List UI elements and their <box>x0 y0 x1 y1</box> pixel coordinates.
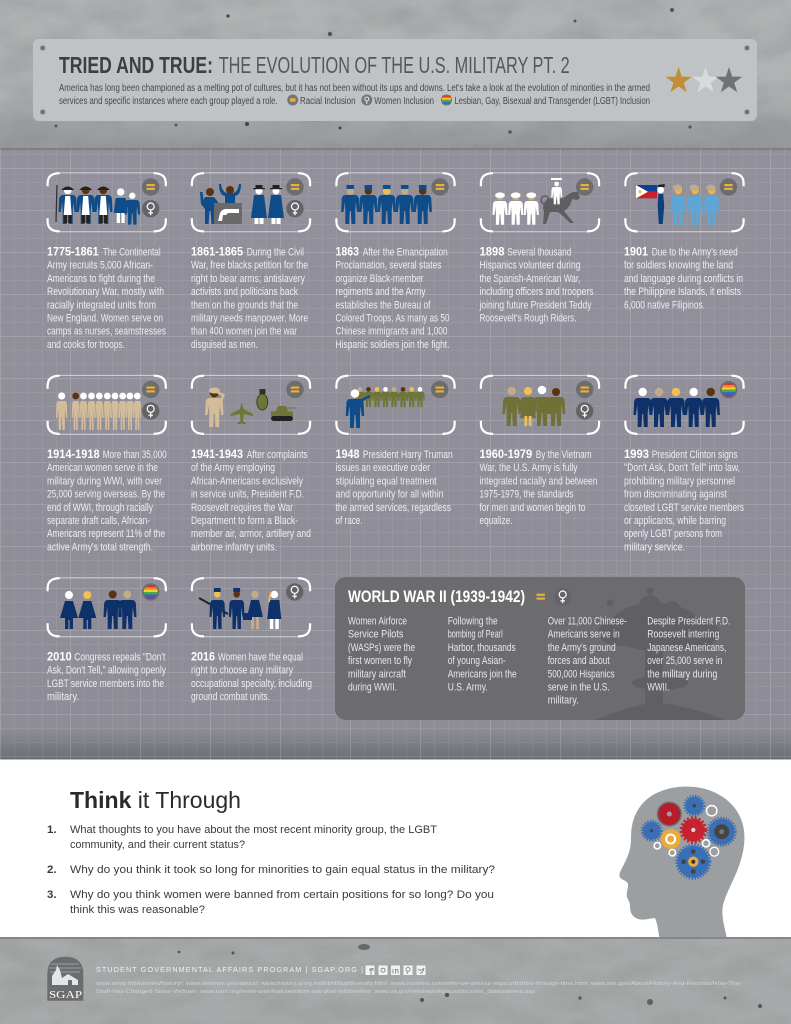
image frame <box>481 173 599 232</box>
text: 1861-1865: activists and politicians back <box>191 286 298 298</box>
text: 1861-1865 <box>191 244 308 351</box>
intro text: services and specific instances where each group played a role. <box>59 96 278 107</box>
text: 1898: Several thousand <box>507 246 571 258</box>
text: 1898 <box>479 244 594 324</box>
text: 1914-1918: 25,000 serving overseas. By the <box>47 489 165 501</box>
text: 1775-1861: Army recruits 5,000 African- <box>47 260 153 272</box>
text: 1993: prohibiting military personnel <box>624 475 735 487</box>
column: Japanese Americans: WWII. <box>647 682 669 694</box>
panel: 1960-1979 <box>480 375 599 527</box>
text: 1863: After the Emancipation <box>363 246 448 258</box>
icon: line of uniformed women <box>56 392 141 430</box>
text: 1914-1918: separate draft calls, African- <box>47 515 150 527</box>
icon: five colored troops <box>341 185 432 224</box>
badge: LGBT <box>142 583 159 601</box>
panel: 1941-1943 <box>191 375 311 553</box>
text: 1861-1865: right to bear arms; antislavery <box>191 273 305 285</box>
text: 1901: 1901 <box>624 244 648 258</box>
image frame <box>625 375 744 434</box>
text: 1914-1918 <box>47 447 167 553</box>
panel: Think it Through <box>0 760 791 938</box>
text: 2016: right to choose any military <box>191 665 293 677</box>
icon: Philippine flag and Filipino soldiers <box>636 184 720 225</box>
question 2: 2. <box>47 864 56 876</box>
text: 1993 <box>624 447 744 553</box>
text: 1775-1861: New England. Women serve on <box>47 312 163 324</box>
text: 1861-1865: disguised as men. <box>191 339 258 351</box>
badge: racial <box>286 178 304 196</box>
icon: two couples <box>60 590 136 629</box>
text: 1898: Hispanics volunteer during <box>480 260 580 272</box>
question 3 <box>47 889 494 916</box>
column: Japanese Americans: the military during <box>647 668 717 680</box>
text: 1993: openly LGBT persons from <box>624 528 722 540</box>
panel: 1861-1865 <box>191 173 310 351</box>
text: 1898: the Spanish-American War, <box>480 273 580 285</box>
text: 1863: establishes the Bureau of <box>336 299 431 311</box>
badge: racial <box>576 178 593 196</box>
text: 1993: 1993 <box>624 447 649 461</box>
image frame <box>336 173 455 232</box>
icon: women in combat and service roles <box>199 588 281 629</box>
text: 1948: of race. <box>336 515 362 527</box>
text: 1863: Chinese immigrants and 1,000 <box>336 326 448 338</box>
text: 1861-1865: than 400 women join the war <box>191 326 297 338</box>
panel: 1914-1918 <box>47 375 167 553</box>
legend: women inclusion: Women Inclusion <box>374 96 434 107</box>
logo: SGAP: SGAP <box>49 989 82 1001</box>
text: 1941-1943: Department to form a Black- <box>191 515 298 527</box>
text: 2016: 2016 <box>191 650 215 664</box>
panel: 2016 <box>191 578 312 703</box>
text: 2010: Ask, Don't Tell," allowing openly <box>47 665 166 677</box>
legend: LGBT inclusion <box>441 94 650 107</box>
heading: WORLD WAR II (1939-1942) <box>348 588 525 606</box>
column: Chinese-Americans and Hispanics: forces and about <box>548 655 610 667</box>
title <box>59 52 570 78</box>
panel: World War II <box>335 577 745 722</box>
text: 1863 <box>336 244 450 351</box>
footer band <box>0 937 791 1024</box>
text: 1941-1943 <box>191 447 311 553</box>
badge: racial <box>720 178 737 196</box>
column: WASPs: Women Airforce <box>348 616 407 628</box>
image frame <box>192 173 310 232</box>
top concrete band <box>0 0 791 149</box>
text: 1861-1865: 1861-1865 <box>191 244 243 258</box>
text: 1941-1943: in service units, President F.D. <box>191 489 304 501</box>
icon: head with gears <box>619 787 744 937</box>
badge: racial <box>286 381 304 398</box>
text: 1861-1865: military needs manpower. More <box>191 312 308 324</box>
panel: 1775-1861 <box>47 173 166 351</box>
text: 1948: President Harry Truman <box>363 449 453 461</box>
text: 1993: military service. <box>624 541 685 553</box>
column: Pearl Harbor: Following the <box>448 616 498 628</box>
grid background panel <box>0 148 791 760</box>
column: Japanese Americans: Despite President F.D. <box>647 616 730 628</box>
text: 1914-1918: American women serve in the <box>47 462 158 474</box>
text: 1898: joining future President Teddy <box>479 299 592 311</box>
text: 1775-1861 <box>47 244 166 351</box>
image frame <box>336 375 455 434</box>
text: 1993: President Clinton signs <box>652 449 738 461</box>
text: 1914-1918: active Army's total strength. <box>47 541 153 553</box>
text: 1960-1979: 1975-1979, the standards <box>480 489 574 501</box>
question 1 <box>47 824 437 851</box>
text: 1993: from discriminating against <box>624 489 727 501</box>
text: 1960-1979: integrated racially and between <box>480 475 598 487</box>
text: 1861-1865: During the Civil <box>247 246 304 258</box>
text: 1960-1979: equalize. <box>480 515 512 527</box>
text: 1948 <box>336 447 453 527</box>
footer program line: STUDENT GOVERNMENTAL AFFAIRS PROGRAM | SGAP.ORG | <box>96 965 363 974</box>
source URLs <box>95 981 742 995</box>
text: 1948: the armed services, regardless <box>336 502 451 514</box>
column: Japanese Americans <box>647 616 730 694</box>
text: 2010: LGBT service members into the <box>47 678 164 690</box>
badge: women <box>286 583 303 601</box>
column: Chinese-Americans and Hispanics: military. <box>548 695 579 707</box>
text: 1898: Roosevelt's Rough Riders. <box>480 312 576 324</box>
text: 1941-1943: After complaints <box>247 449 308 461</box>
text: 2016: ground combat units. <box>191 691 270 703</box>
text: 1863: Hispanic soldiers join the fight. <box>336 339 450 351</box>
text: 1960-1979: By the Vietnam <box>536 449 592 461</box>
icon: continental soldiers and women <box>56 185 140 225</box>
text: 1901: Due to the Army's need <box>652 246 738 258</box>
badge: women <box>554 588 571 605</box>
text: 2010: Congress repeals "Don't <box>74 652 165 664</box>
text: 1960-1979: 1960-1979 <box>480 447 532 461</box>
column: Japanese Americans: Japanese Americans, <box>647 642 726 654</box>
badge: racial <box>576 381 593 398</box>
text: 1775-1861: Revolutionary War, mostly with <box>47 286 164 298</box>
column: Chinese-Americans and Hispanics: serve in the U.S. <box>548 682 610 694</box>
text: 2010: military. <box>47 691 79 703</box>
column: WASPs: Service Pilots <box>348 629 404 641</box>
header plate <box>33 39 757 121</box>
text: 1941-1943: of the Army employing <box>191 462 275 474</box>
text: 1775-1861: The Continental <box>103 246 161 258</box>
text: 1914-1918: 1914-1918 <box>47 447 100 461</box>
text: 2016: Women have the equal <box>218 652 303 664</box>
text: 1901: and language during conflicts in <box>624 273 743 285</box>
column: WASPs: first women to fly <box>348 655 412 667</box>
text: 1948: issues an executive order <box>336 462 430 474</box>
badge: LGBT <box>720 381 737 398</box>
text: 1993: or applicants, while barring <box>624 515 726 527</box>
question 2: Why do you think it took so long for minorities to gain equal status in the military? <box>70 864 495 876</box>
intro text <box>59 83 650 107</box>
title: TRIED AND TRUE: <box>59 52 213 78</box>
text: 1775-1861: racially integrated units from <box>47 299 156 311</box>
panel: 1863 <box>336 173 455 351</box>
icon: three stars <box>665 67 742 92</box>
panel: 2010 <box>47 578 166 703</box>
text: 1863: Colored Troops. As many as 50 <box>336 312 450 324</box>
mushroom cloud <box>590 588 730 722</box>
text: 1948: 1948 <box>336 447 360 461</box>
icon: five service members <box>634 388 720 427</box>
icon: saluting airman, plane, grenade, tank <box>205 388 296 427</box>
column: Chinese-Americans and Hispanics <box>548 616 627 707</box>
text: 1993: "Don't Ask, Don't Tell" into law, <box>624 462 740 474</box>
image frame <box>48 375 166 434</box>
text: 1863: Proclamation, several states <box>336 260 442 272</box>
text: 1941-1943: 1941-1943 <box>191 447 243 461</box>
question 3: think this was reasonable? <box>70 904 205 916</box>
source URLs: www.army.mil/women/history/; www.defense.gov/about/; www.history.army.mil/html/faq/diversity.html; www.marines.com/who-we-are/our-legacy/battles-through-time.html; www.sss.gov/About/History-And-Records/How-The- <box>95 981 742 987</box>
column: Pearl Harbor <box>448 616 517 694</box>
column: Pearl Harbor: Americans join the <box>448 668 517 680</box>
panel: 1898 <box>479 173 599 324</box>
badge: racial <box>142 381 159 398</box>
text: 2010 <box>47 650 166 703</box>
text: 1861-1865: them on the grounds that the <box>191 299 298 311</box>
image frame <box>625 173 744 232</box>
column: Chinese-Americans and Hispanics: the Army's ground <box>548 642 616 654</box>
panel: 1993 <box>624 375 744 553</box>
text: 1914-1918: end of WWI, through racially <box>47 502 153 514</box>
column: WASPs: during WWII. <box>348 682 397 694</box>
text: 1863: organize Black-member <box>336 273 424 285</box>
legend: racial inclusion <box>287 94 356 107</box>
column: Japanese Americans: over 25,000 serve in <box>647 655 722 667</box>
text: 1948: and opportunity for all within <box>336 489 444 501</box>
text: 1948: stipulating equal treatment <box>336 475 436 487</box>
question 3: 3. <box>47 889 56 901</box>
text: 2010: 2010 <box>47 650 72 664</box>
text: 1914-1918: military during WWI, with over <box>47 475 162 487</box>
question 1: What thoughts to you have about the most recent minority group, the LGBT <box>70 824 437 836</box>
logo: SGAP <box>47 957 83 1001</box>
panel: 1948 <box>336 375 455 527</box>
column: Pearl Harbor: bombing of Pearl <box>448 629 503 641</box>
text: 1901: the Philippine Islands, it enlists <box>624 286 741 298</box>
title: THE EVOLUTION OF THE U.S. MILITARY PT. 2 <box>219 52 570 78</box>
image frame <box>192 375 310 434</box>
image frame <box>48 578 166 637</box>
text: 1914-1918: More than 35,000 <box>103 449 167 461</box>
question 3: Why do you think women were banned from certain positions for so long? Do you <box>70 889 494 901</box>
badge: women <box>576 402 593 420</box>
heading: Think it Through <box>70 787 241 813</box>
badge: women <box>142 200 159 217</box>
text: 1941-1943: member air, armor, artillery and <box>191 528 311 540</box>
column: Chinese-Americans and Hispanics: Over 11,000 Chinese- <box>548 616 627 628</box>
question 1: 1. <box>47 824 56 836</box>
legend: racial inclusion: Racial Inclusion <box>300 96 356 107</box>
column: Chinese-Americans and Hispanics: 500,000 Hispanics <box>548 668 615 680</box>
question 1: community, and their current status? <box>70 839 245 851</box>
text: 1898: 1898 <box>480 244 505 258</box>
column: WASPs: (WASPs) were the <box>348 642 415 654</box>
panel: 1901 <box>624 173 744 311</box>
image frame <box>481 375 599 434</box>
column: Chinese-Americans and Hispanics: Americans serve in <box>548 629 620 641</box>
icons: social media <box>366 966 426 975</box>
column: Japanese Americans: Roosevelt interring <box>647 629 719 641</box>
text: 1901: for soldiers knowing the land <box>624 260 733 272</box>
icon: Truman and integrated troops <box>346 387 425 428</box>
badge: racial <box>532 588 549 605</box>
text: 1914-1918: Americans represent 11% of the <box>47 528 165 540</box>
text: 1941-1943: Roosevelt requires the War <box>191 502 293 514</box>
image frame <box>192 578 310 637</box>
column: Pearl Harbor: of young Asian- <box>448 655 506 667</box>
badge: women <box>286 200 304 217</box>
text: 1898: including officers and troopers <box>480 286 594 298</box>
text: 2016 <box>191 650 312 703</box>
source URLs: Draft-Has-Changed-Since-Vietnam; www.usni.org/news-and-features/dont-ask-dont-tell/timeline; www.va.gov/vetsinworkplace/docs/em_datesnames.asp <box>96 989 535 995</box>
legend: LGBT inclusion: Lesbian, Gay, Bisexual and Transgender (LGBT) Inclusion <box>454 96 650 107</box>
column: WASPs: military aircraft <box>348 668 406 680</box>
column: Pearl Harbor: Harbor, thousands <box>448 642 516 654</box>
badge: women <box>142 402 159 420</box>
text: 2016: occupational specialty, including <box>191 678 312 690</box>
text: 1863: 1863 <box>336 244 359 258</box>
text: 1775-1861: Americans to fight during the <box>47 273 155 285</box>
text: 1775-1861: and cooks for troops. <box>47 339 125 351</box>
text: 1960-1979: War, the U.S. Army is fully <box>480 462 578 474</box>
text: 1861-1865: War, free blacks petition for the <box>191 260 308 272</box>
text: 1863: regiments and the Army <box>336 286 426 298</box>
text: 1775-1861: camps as nurses, seamstresses <box>47 326 166 338</box>
icon: integrated Vietnam-era soldiers <box>502 386 565 426</box>
text: 1901: 6,000 native Filipinos. <box>624 299 705 311</box>
text: 1960-1979 <box>480 447 598 527</box>
text: 1941-1943: airborne infantry units. <box>191 541 277 553</box>
legend: women inclusion <box>361 94 434 107</box>
text: 1775-1861: 1775-1861 <box>47 244 99 258</box>
text: 1941-1943: African-Americans exclusively <box>191 475 303 487</box>
badge: racial <box>431 381 448 398</box>
intro text: America has long been championed as a melting pot of cultures, but it has not been without its ups and downs. Let's take a look at the evolution of minorities in the armed <box>59 83 650 94</box>
badge: racial <box>431 178 449 196</box>
icon: rough riders and horse <box>492 178 580 225</box>
column: Pearl Harbor: U.S. Army. <box>448 682 488 694</box>
image frame <box>48 173 166 232</box>
badge: racial <box>142 178 159 196</box>
text: 1960-1979: for men and women begin to <box>480 502 586 514</box>
column: WASPs <box>348 616 415 694</box>
icon: free blacks, revolver, disguised women <box>200 184 284 224</box>
text: 1901 <box>624 244 743 311</box>
text: 1993: closeted LGBT service members <box>624 502 744 514</box>
